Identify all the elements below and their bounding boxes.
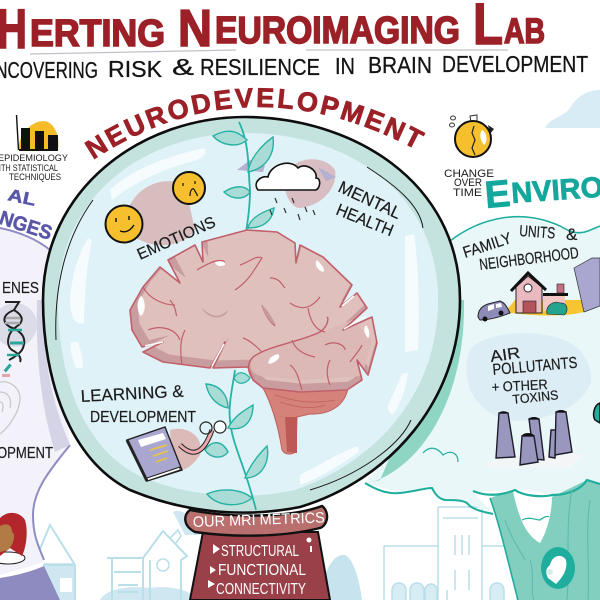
label: mental health: MENTAL — [335, 177, 404, 223]
label: genes: ENES — [2, 280, 39, 297]
background: campus buildings — [37, 507, 517, 600]
sulci — [143, 257, 362, 390]
label: air pollutants — [489, 345, 578, 407]
glass highlights — [70, 148, 419, 485]
panel: biological challenges bubble — [0, 185, 70, 600]
subtitle: RISK — [108, 56, 163, 82]
icon: book with worm — [127, 421, 226, 481]
icon: sad face — [173, 172, 205, 204]
lower lavender base — [0, 566, 60, 600]
label: family units and neighborhood: & — [566, 225, 578, 244]
metric list: FUNCTIONAL — [218, 562, 306, 579]
label: change over time — [444, 168, 494, 199]
label: learning and development — [80, 382, 196, 426]
vine upper — [213, 122, 274, 232]
cerebellum and stem — [263, 388, 348, 454]
subtitle: IN — [335, 53, 355, 79]
vine lower — [205, 370, 268, 510]
globe — [43, 117, 464, 513]
title underline — [30, 50, 508, 54]
globe body — [43, 117, 460, 513]
air pollutants cloud — [466, 333, 591, 421]
heading: challenges fragment: AL — [6, 185, 38, 210]
heading: environment: E — [483, 173, 512, 217]
label: learning and development: DEVELOPMENT — [90, 409, 196, 426]
cerebrum base shade — [130, 230, 377, 392]
title: AB — [504, 12, 545, 51]
icon: dna helix — [0, 302, 37, 377]
title: ERTING — [30, 13, 165, 55]
heading: challenges fragment — [0, 185, 55, 245]
label: change over time: CHANGE — [444, 168, 494, 180]
notch highlights — [145, 296, 366, 366]
label: change over time: OVER — [454, 177, 482, 189]
icon: factory chimneys — [484, 410, 583, 468]
label: mental health: HEALTH — [334, 200, 396, 240]
metric list — [208, 538, 312, 598]
brain — [130, 227, 377, 454]
heading: environment — [483, 172, 600, 217]
cerebrum light surface — [138, 227, 377, 384]
icon: happy face — [106, 206, 142, 242]
icon: rain cloud — [256, 163, 320, 220]
icon: bird in tree hollow — [541, 547, 575, 589]
heading: neurodevelopment: NEURODEVELOPMENT — [84, 88, 426, 160]
base pedestal — [190, 532, 330, 600]
ground — [505, 300, 590, 316]
label: epidemiology — [0, 153, 69, 183]
subtitle: & — [172, 54, 194, 80]
icon: faint brain swirl — [0, 382, 20, 434]
label: epidemiology: TECHNIQUES — [9, 172, 61, 183]
subtitle: RESILIENCE — [200, 54, 320, 80]
inner shading strokes — [56, 167, 423, 490]
emotions blob — [127, 181, 195, 245]
label: emotions: EMOTIONS — [135, 214, 218, 264]
globe outline — [43, 117, 460, 513]
tree trunk — [490, 480, 600, 600]
icon: girl head — [0, 513, 27, 564]
label: air pollutants: TOXINS — [512, 387, 559, 407]
label: family units and neighborhood: UNITS — [519, 223, 556, 243]
plaque text: OUR MRI METRICS — [193, 509, 325, 531]
metric list: STRUCTURAL — [221, 543, 299, 560]
mental health blob — [284, 159, 335, 208]
subtitle — [0, 51, 588, 83]
metric list: CONNECTIVITY — [216, 581, 306, 598]
background: pale blue sky cloud — [545, 90, 600, 128]
label: family units and neighborhood: FAMILY — [461, 230, 514, 262]
title: EUROIMAGING — [215, 10, 460, 52]
label: air pollutants: AIR — [489, 345, 521, 366]
label: air pollutants: + OTHER — [491, 376, 548, 395]
metrics plaque — [185, 506, 327, 536]
icon: stopwatch — [450, 115, 494, 157]
label: family units and neighborhood — [461, 223, 580, 274]
cloud outline fragment — [423, 448, 458, 462]
title — [0, 0, 545, 60]
panel: environment tree canopy — [365, 217, 600, 600]
temporal lobe line — [249, 317, 328, 385]
globe rim shadow — [366, 300, 464, 484]
label: epidemiology: EPIDEMIOLOGY — [0, 153, 69, 164]
car — [478, 301, 510, 322]
icon: bar chart with sun — [16, 115, 58, 150]
bush — [547, 302, 567, 315]
cerebrum outline — [130, 230, 377, 392]
globe glass interior — [58, 133, 438, 496]
house — [516, 276, 542, 313]
icon: neighborhood scene — [478, 258, 600, 322]
panel: mri metrics base — [185, 506, 330, 600]
title: N — [178, 0, 212, 58]
subtitle: BRAIN — [368, 52, 432, 78]
building — [574, 258, 600, 312]
label: learning and development: LEARNING & — [80, 382, 185, 406]
label: air pollutants: POLLUTANTS — [492, 355, 578, 379]
label: change over time: TIME — [453, 187, 482, 199]
icon: partial object at right edge — [594, 403, 600, 423]
brain highlights — [138, 260, 369, 364]
